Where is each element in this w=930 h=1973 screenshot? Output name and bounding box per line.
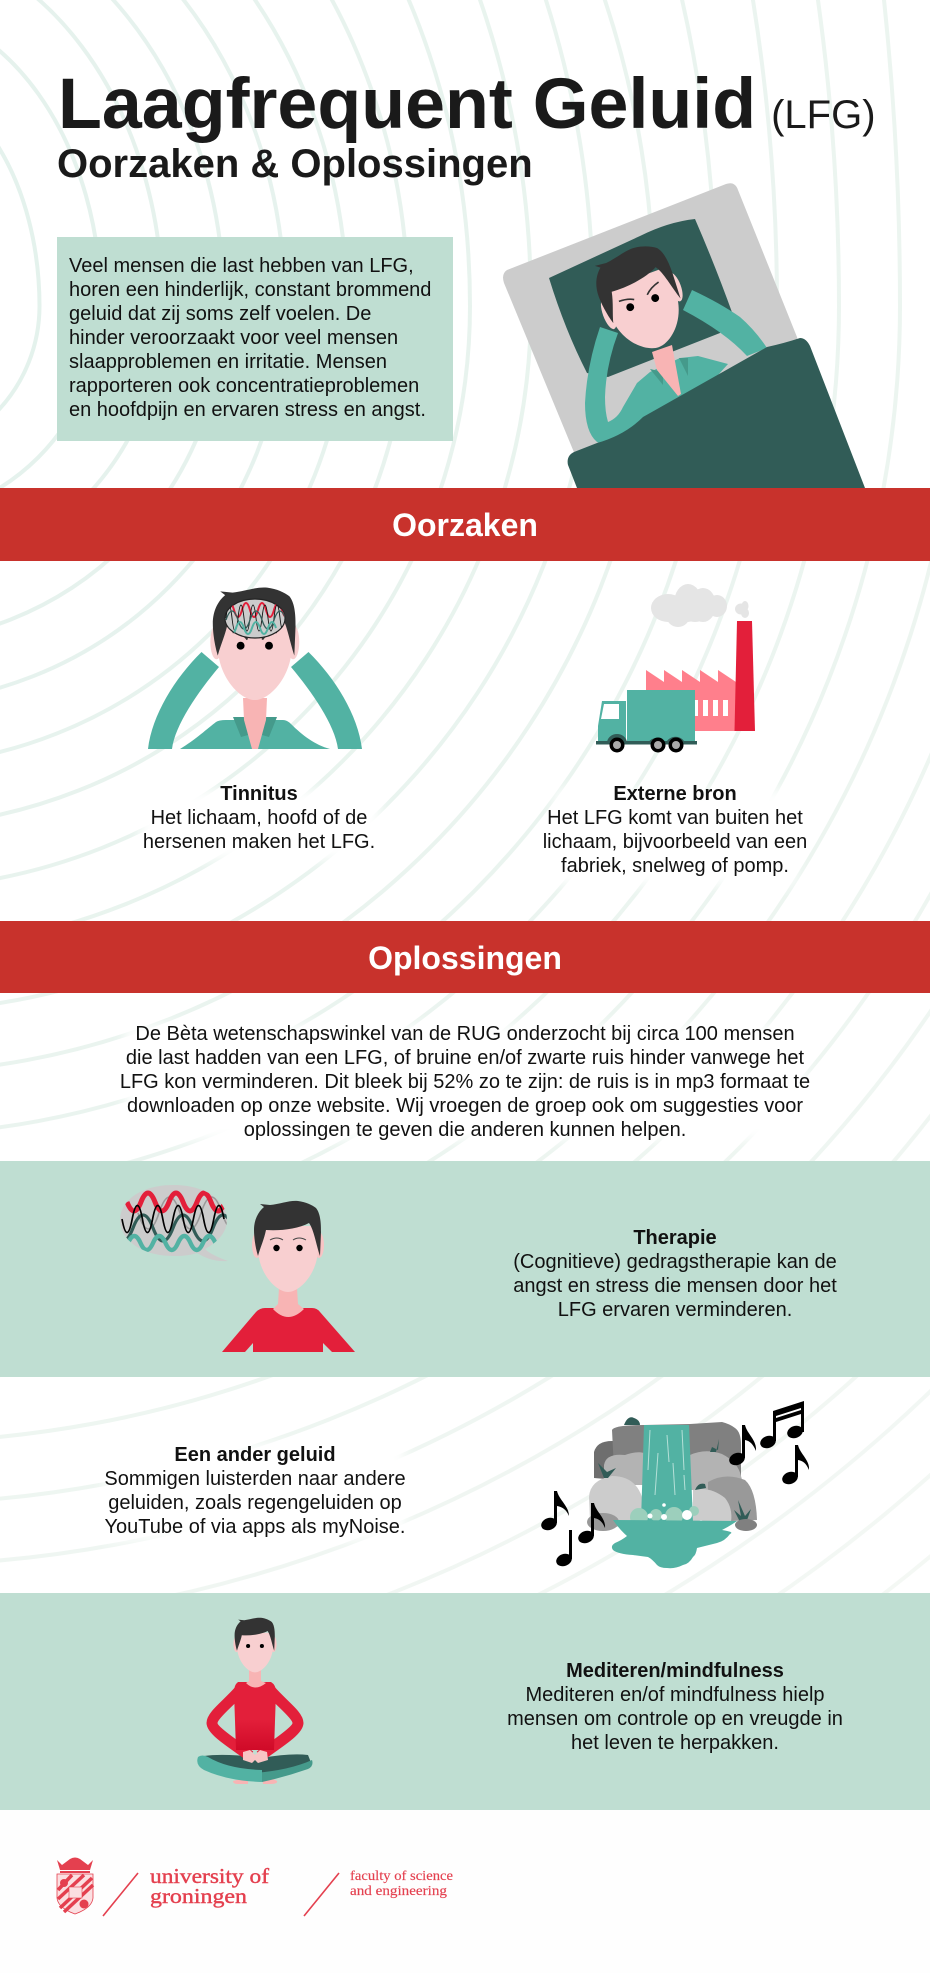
- title: Laagfrequent Geluid (LFG): [58, 64, 876, 144]
- text: Therapie: Therapie: [633, 1227, 717, 1249]
- illustration: tinnitus person: [148, 587, 362, 749]
- text: onderzoek: [120, 1023, 810, 1141]
- intro text: slaapproblemen en irritatie. Mensen: [69, 351, 387, 373]
- text: onderzoek: De Bèta wetenschapswinkel van de RUG onderzocht bij circa 100 mensen: [135, 1023, 795, 1045]
- text: Tinnitus: Het lichaam, hoofd of de: [151, 807, 367, 829]
- text: Externe bron: fabriek, snelweg of pomp.: [561, 855, 789, 877]
- collar: [233, 717, 277, 737]
- head: [233, 1618, 277, 1672]
- intro text: en hoofdpijn en ervaren stress en angst.: [69, 399, 426, 421]
- stones: [587, 1513, 619, 1531]
- text: onderzoek: die last hadden van een LFG, of bruine en/of zwarte ruis hinder vanwege het: [126, 1047, 804, 1069]
- intro text: Veel mensen die last hebben van LFG,: [69, 255, 414, 277]
- head: [252, 1201, 324, 1292]
- slash: [103, 1873, 138, 1916]
- text: Mediteren/mindfulness: het leven te herpakken.: [571, 1732, 779, 1754]
- band: Oorzaken: [0, 488, 930, 561]
- text: Een ander geluid: geluiden, zoals regengeluiden op: [108, 1492, 402, 1514]
- text: Een ander geluid: [104, 1444, 406, 1538]
- text: Tinnitus: hersenen maken het LFG.: [143, 831, 375, 853]
- panel: mediteren: [0, 1593, 930, 1810]
- text: Mediteren/mindfulness: [507, 1660, 843, 1754]
- illustration: talking person with speech bubble: [113, 1185, 355, 1352]
- text: Een ander geluid: Een ander geluid: [174, 1444, 336, 1466]
- illustration: factory and truck: [596, 584, 755, 752]
- text: Therapie: angst en stress die mensen door het: [513, 1275, 837, 1297]
- text: Een ander geluid: YouTube of via apps als myNoise.: [105, 1516, 405, 1538]
- shirt: [180, 720, 330, 749]
- torso: [234, 1682, 276, 1750]
- rocks: [594, 1441, 618, 1480]
- foam: [630, 1506, 699, 1526]
- crest: [57, 1858, 93, 1914]
- arms: [148, 652, 219, 749]
- waves: [121, 1190, 227, 1252]
- text: onderzoek: downloaden op onze website. Wij vroegen de groep ook om suggesties voor: [127, 1095, 803, 1117]
- text: Mediteren/mindfulness: Mediteren/mindfulness: [566, 1660, 784, 1682]
- intro text: [69, 255, 431, 421]
- neck: [246, 1670, 266, 1688]
- arms: [212, 1690, 250, 1756]
- text: Externe bron: lichaam, bijvoorbeeld van een: [543, 831, 807, 853]
- blanket: [568, 338, 865, 488]
- chimney: [734, 621, 755, 731]
- brain waves: [225, 599, 290, 638]
- factory: [646, 670, 736, 731]
- slash: [304, 1873, 339, 1916]
- text: Externe bron: Het LFG komt van buiten het: [547, 807, 803, 829]
- head: [585, 237, 698, 361]
- text: Tinnitus: Tinnitus: [220, 783, 298, 805]
- text: Therapie: [513, 1227, 837, 1321]
- grass: [598, 1439, 751, 1523]
- text: Externe bron: Externe bron: [613, 783, 737, 805]
- wordmark: university of: [150, 1864, 269, 1888]
- text: Een ander geluid: Sommigen luisterden naar andere: [104, 1468, 406, 1490]
- illustration: meditating person: [197, 1618, 312, 1784]
- logo: university of groningen: groningen: [150, 1884, 248, 1908]
- truck: [627, 690, 695, 743]
- feet: [233, 1774, 277, 1784]
- intro text panel: [57, 237, 453, 441]
- logo: university of groningen: [57, 1858, 453, 1916]
- pool: [612, 1520, 737, 1568]
- left arm: [585, 327, 652, 444]
- intro text: rapporteren ook concentratieproblemen: [69, 375, 419, 397]
- falling water: [641, 1425, 693, 1521]
- front leg: [197, 1756, 262, 1782]
- right arm: [683, 290, 767, 356]
- intro text: geluid dat zij soms zelf voelen. De: [69, 303, 371, 325]
- heading: Oplossingen: Oplossingen: [368, 940, 562, 976]
- music notes: [539, 1401, 809, 1568]
- illustration: person lying in bed: [503, 183, 865, 488]
- logo: university of groningen: and engineering: [350, 1883, 447, 1898]
- text: Tinnitus: [143, 783, 375, 853]
- subtitle: Oorzaken & Oplossingen: [57, 142, 533, 186]
- pillow: [503, 183, 800, 462]
- back leg: [204, 1754, 312, 1775]
- text: Mediteren/mindfulness: Mediteren en/of mindfulness hielp: [525, 1684, 825, 1706]
- text: Therapie: LFG ervaren verminderen.: [558, 1299, 792, 1321]
- intro text: hinder veroorzaakt voor veel mensen: [69, 327, 398, 349]
- head: [210, 587, 299, 700]
- text: onderzoek: oplossingen te geven die anderen kunnen helpen.: [244, 1119, 686, 1141]
- text: Mediteren/mindfulness: mensen om controle op en vreugde in: [507, 1708, 843, 1730]
- intro text: horen een hinderlijk, constant brommend: [69, 279, 431, 301]
- shirt: [222, 1308, 355, 1352]
- text: Externe bron: [543, 783, 807, 877]
- panel: therapie: [0, 1161, 930, 1377]
- heading: Oorzaken: Oorzaken: [392, 507, 538, 543]
- windows: [695, 700, 728, 716]
- neck: [243, 698, 267, 749]
- neck: [652, 345, 681, 396]
- speech bubble: [120, 1185, 228, 1261]
- band: Oplossingen: [0, 921, 930, 993]
- illustration: waterfall with music notes: [539, 1401, 809, 1568]
- shirt: [630, 356, 728, 425]
- smoke: [651, 584, 749, 627]
- text: Therapie: (Cognitieve) gedragstherapie kan de: [513, 1251, 837, 1273]
- hands: [243, 1750, 268, 1763]
- faculty wordmark: faculty of science: [350, 1868, 453, 1883]
- neck: [273, 1288, 304, 1317]
- text: onderzoek: LFG kon verminderen. Dit bleek bij 52% zo te zijn: de ruis is in mp3 formaat te: [120, 1071, 810, 1093]
